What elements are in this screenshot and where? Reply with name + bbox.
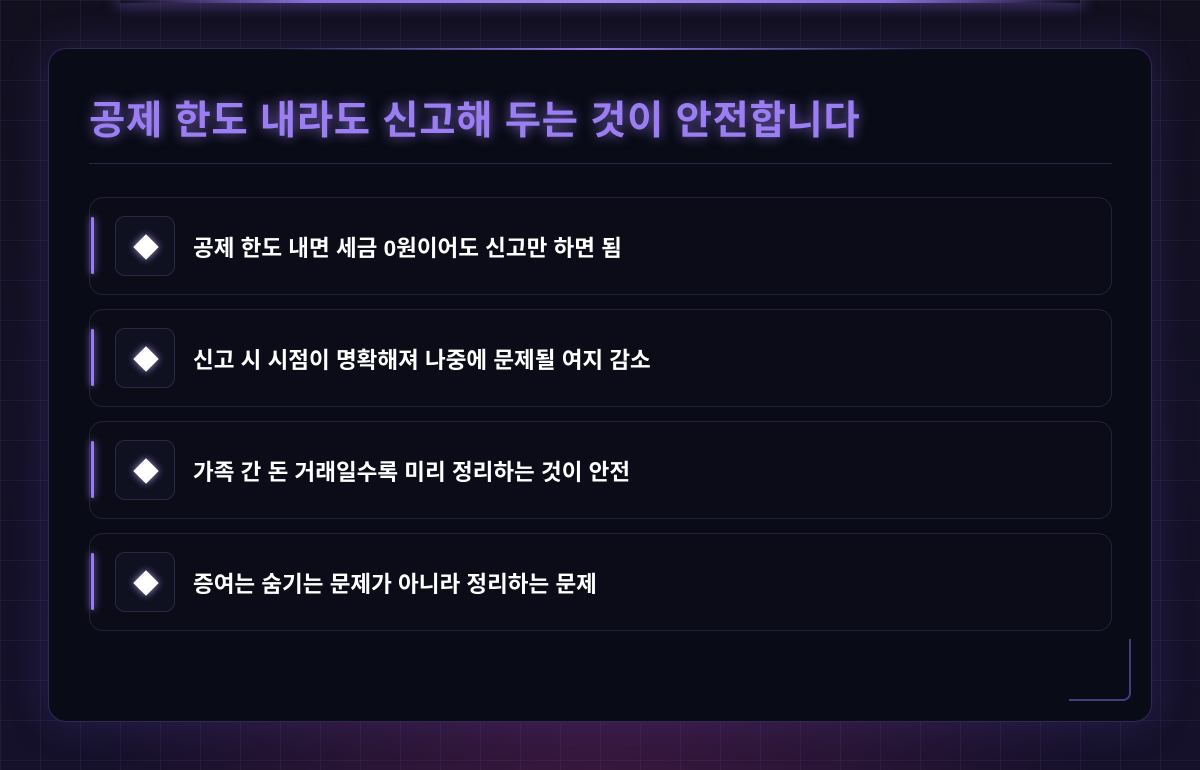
top glow bar [120, 0, 1080, 3]
icon: diamond [115, 552, 175, 612]
item 1 [89, 197, 1112, 295]
icon: diamond [115, 216, 175, 276]
text 1: 공제 한도 내면 세금 0원이어도 신고만 하면 됨 [193, 236, 622, 261]
corner bracket [1069, 639, 1131, 701]
text 4: 증여는 숨기는 문제가 아니라 정리하는 문제 [193, 572, 597, 597]
icon: diamond [115, 328, 175, 388]
icon: diamond [115, 440, 175, 500]
item 3 [89, 421, 1112, 519]
text 2: 신고 시 시점이 명확해져 나중에 문제될 여지 감소 [193, 348, 651, 373]
item 2 [89, 309, 1112, 407]
text 3: 가족 간 돈 거래일수록 미리 정리하는 것이 안전 [193, 460, 630, 485]
item 4 [89, 533, 1112, 631]
title: 공제 한도 내라도 신고해 두는 것이 안전합니다 [89, 99, 860, 143]
